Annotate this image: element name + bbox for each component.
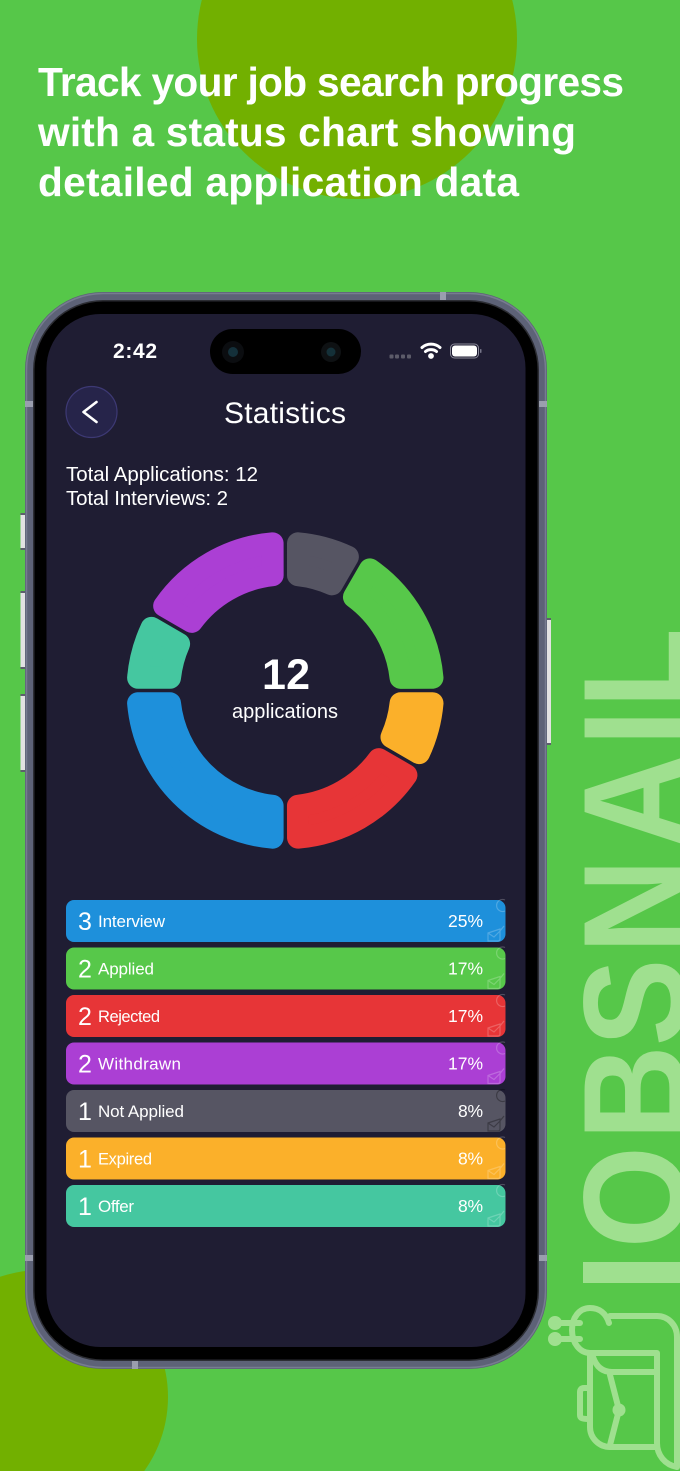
row: expired — [66, 1137, 506, 1180]
row: offer — [66, 1184, 506, 1227]
segment: withdrawn — [164, 512, 286, 645]
phone body — [25, 292, 547, 1369]
row: applied: 17% — [448, 958, 483, 978]
phone hardware buttons — [20, 513, 551, 772]
donut center total — [232, 651, 338, 723]
row: interview: 3 — [78, 908, 92, 936]
decorative circle: bottom left — [0, 1270, 168, 1471]
row: expired: 1 — [78, 1146, 92, 1174]
row: not applied: 8% — [458, 1101, 483, 1121]
segment: not applied — [298, 543, 348, 584]
row: not applied: 1 — [78, 1098, 92, 1126]
segment: expired — [392, 703, 432, 753]
phone screen — [46, 314, 526, 1347]
donut chart — [138, 512, 464, 869]
icon: battery — [450, 344, 482, 358]
row: applied — [66, 947, 506, 990]
row: withdrawn: 17% — [448, 1054, 483, 1074]
row: interview: 25% — [448, 911, 483, 931]
row: expired: Expired — [98, 1150, 152, 1168]
icon: wifi — [422, 344, 440, 357]
row: offer: 8% — [458, 1196, 483, 1216]
headline: detailed application data — [38, 159, 519, 205]
row: rejected: 17% — [448, 1006, 483, 1026]
row: offer: Offer — [98, 1197, 134, 1216]
headline — [37, 59, 624, 205]
row: applied: 2 — [78, 956, 92, 984]
row: applied: Applied — [98, 960, 154, 978]
totals summary: Total Interviews: 2 — [66, 487, 228, 510]
row: not applied — [66, 1090, 506, 1132]
segment: rejected — [284, 736, 406, 869]
row: offer: 1 — [78, 1193, 92, 1221]
row: expired: 8% — [458, 1148, 483, 1168]
row: rejected: Rejected — [98, 1008, 160, 1026]
donut center total: applications — [232, 701, 338, 723]
segment: applied — [331, 569, 464, 692]
row: withdrawn: Withdrawn — [98, 1054, 181, 1074]
row: withdrawn — [66, 1042, 506, 1084]
row: interview: Interview — [98, 912, 166, 931]
row: rejected: 2 — [78, 1003, 92, 1031]
brand logo: snail with briefcase shell — [551, 1308, 677, 1467]
row: rejected — [66, 994, 506, 1037]
totals summary — [66, 463, 258, 510]
headline: Track your job search progress — [38, 59, 624, 105]
row: withdrawn: 2 — [78, 1050, 92, 1078]
vertical brand wordmark — [583, 632, 680, 1283]
screen title: Statistics — [224, 397, 346, 430]
dynamic island — [210, 329, 361, 374]
row: interview — [66, 900, 506, 942]
decorative circle: top — [197, 0, 517, 199]
row: not applied: Not Applied — [98, 1102, 184, 1121]
signal dots — [390, 354, 411, 358]
segment: interview — [138, 703, 273, 838]
donut center total: 12 — [262, 651, 310, 699]
status bar time: 2:42 — [113, 340, 157, 363]
totals summary: Total Applications: 12 — [66, 463, 258, 486]
back button — [66, 386, 117, 438]
segment: offer — [138, 628, 179, 678]
headline: with a status chart showing — [37, 109, 576, 155]
